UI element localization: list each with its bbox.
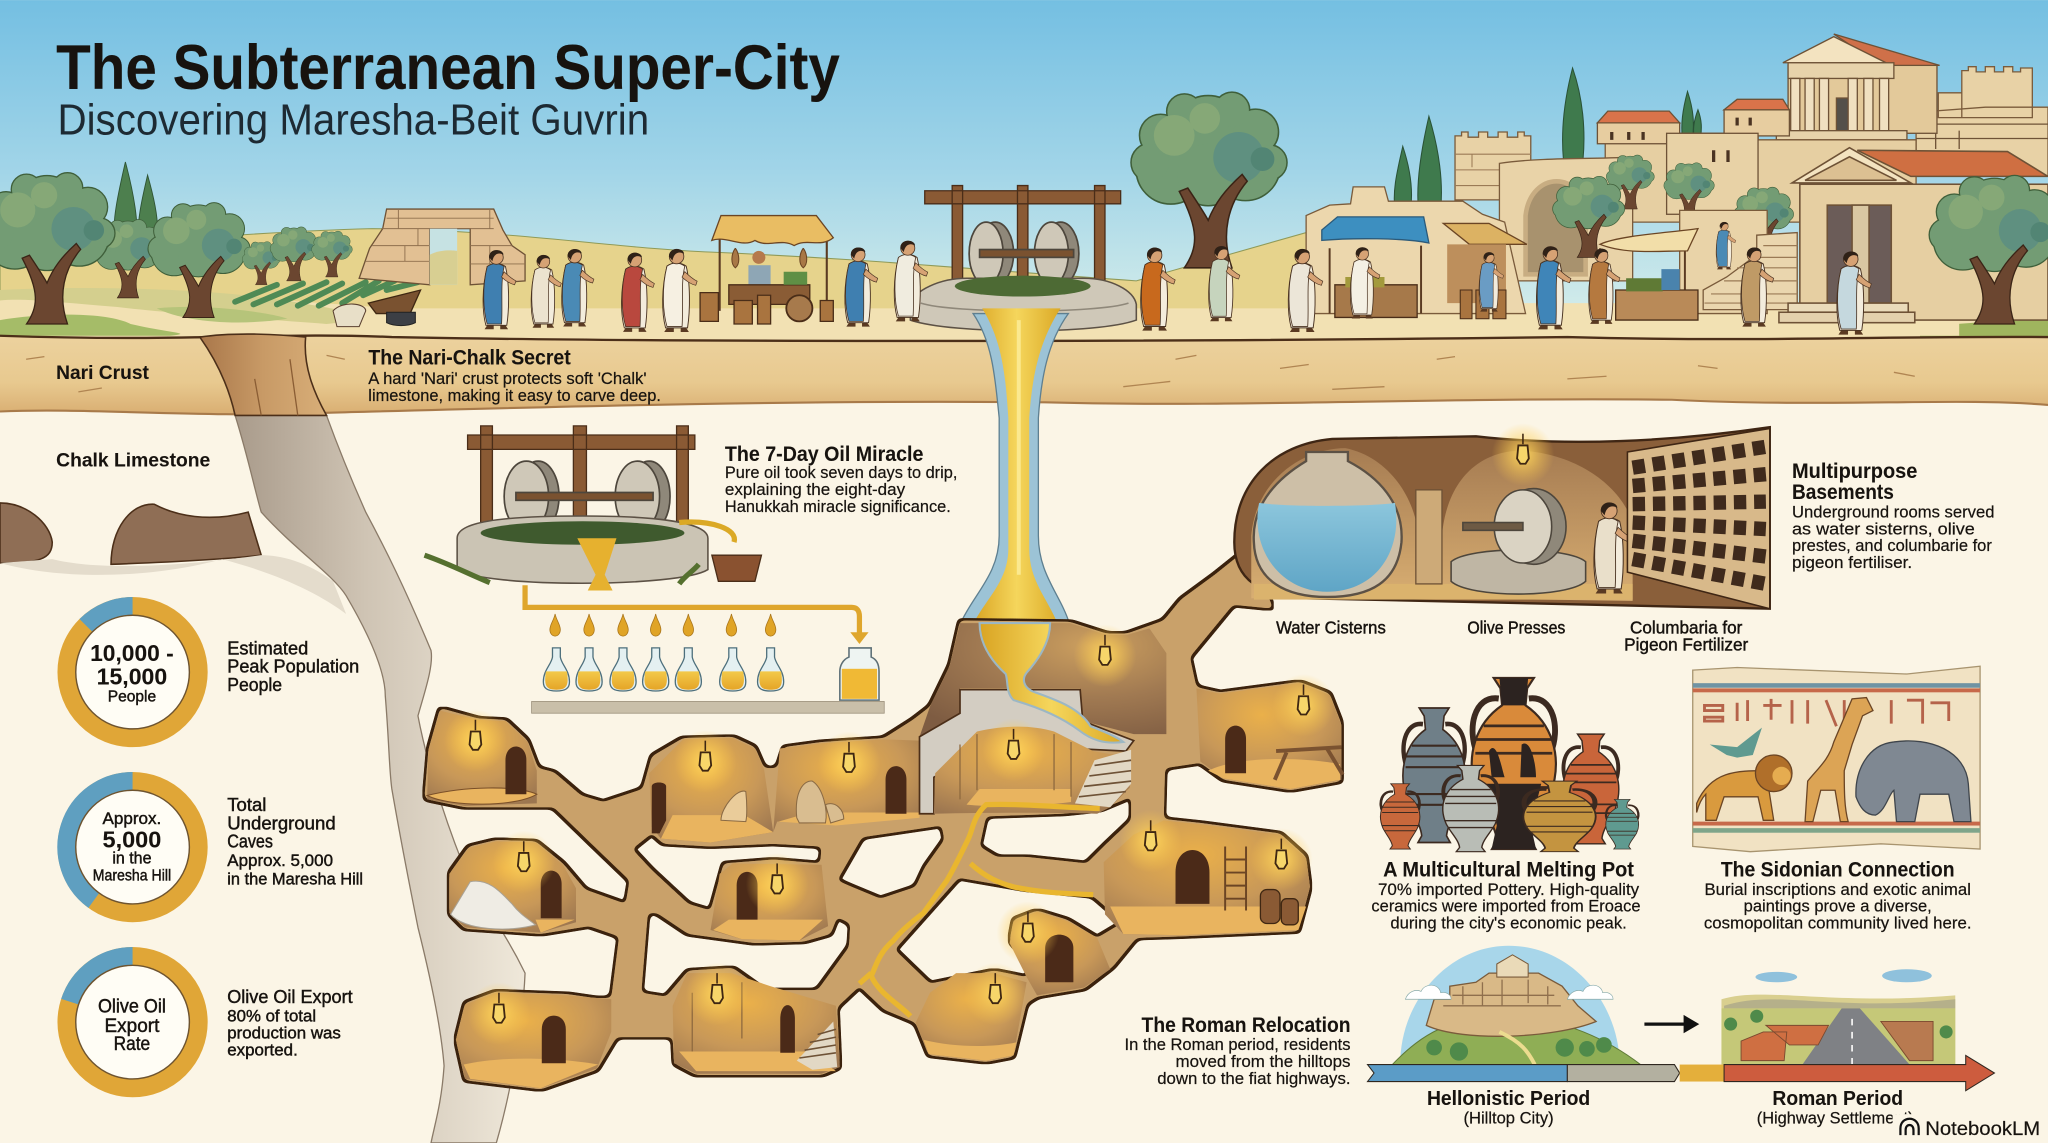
cave: G xyxy=(456,982,611,1088)
gold pipe with arrow xyxy=(525,585,859,637)
lion xyxy=(1697,755,1792,820)
stairs xyxy=(1075,750,1131,807)
full jar xyxy=(840,648,879,700)
cave network xyxy=(424,549,1343,1089)
cave: B xyxy=(649,730,773,843)
text: Hellenistic label: Hellonistic Period xyxy=(1427,1088,1590,1110)
cream awning stall xyxy=(1600,229,1698,320)
black figure details xyxy=(1486,678,1541,849)
rock shaft: crevice through nari crust and chalk xyxy=(200,334,525,1143)
text: caves label: in the Maresha Hill xyxy=(227,869,363,888)
text: Roman Relocation: moved from the hilltops xyxy=(1176,1053,1351,1071)
sky xyxy=(0,0,2048,314)
ruined stone gate xyxy=(359,209,525,285)
callout: 7-Day Oil Miracle xyxy=(725,443,957,516)
text: export label: 80% of total xyxy=(227,1006,316,1025)
city trees xyxy=(1664,163,1714,220)
ring: export xyxy=(67,956,199,1088)
text: export label: Olive Oil Export xyxy=(227,986,353,1007)
surface olive press and basin xyxy=(910,186,1136,624)
callout: 7-Day Oil Miracle: Hanukkah miracle significance. xyxy=(725,498,951,516)
text: population label: People xyxy=(227,674,282,695)
callout: Multipurpose Basements xyxy=(1792,460,1994,572)
text: population label: Estimated xyxy=(227,637,308,658)
stairs xyxy=(1703,233,1797,310)
text: Melting Pot: during the city's economic peak. xyxy=(1390,915,1627,933)
cave: I xyxy=(916,963,1027,1061)
text: basement labels: Pigeon Fertilizer xyxy=(1624,635,1748,655)
ring: caves: 5,000 xyxy=(103,827,161,853)
callout: 7-Day Oil Miracle: explaining the eight-day xyxy=(725,481,906,499)
text: export label xyxy=(227,986,353,1059)
ring: caves: Approx. xyxy=(103,810,161,828)
wheelbarrow cart xyxy=(333,290,421,327)
lamp xyxy=(1492,423,1554,486)
city on the hill xyxy=(1132,34,2048,324)
basin xyxy=(910,278,1136,331)
logo: NotebookLM: NotebookLM xyxy=(1925,1118,2040,1140)
cave: L with bench xyxy=(1196,674,1343,789)
text: basement labels: Water Cisterns xyxy=(1276,618,1386,638)
acropolis temple xyxy=(1776,34,1940,140)
column xyxy=(1416,490,1442,584)
cloud xyxy=(1882,969,1932,982)
text: Sidonian Connection: Burial inscriptions and exotic animal xyxy=(1704,881,1971,899)
press stone basement xyxy=(1451,489,1586,594)
icon: cypress trees left xyxy=(114,162,158,238)
callout: 7-Day Oil Miracle: Pure oil took seven days to drip, xyxy=(725,464,957,482)
text: Sidonian Connection: cosmopolitan community lived here. xyxy=(1704,915,1972,933)
text: Melting Pot: A Multicultural Melting Pot xyxy=(1383,856,1634,881)
callout: Multipurpose Basements: prestes, and columbarie for xyxy=(1792,537,1992,555)
barrels xyxy=(1260,890,1280,924)
basement: multipurpose chambers xyxy=(1234,423,1770,609)
text: Roman Relocation: In the Roman period, residents xyxy=(1125,1036,1351,1054)
callout: Nari-Chalk Secret: The Nari-Chalk Secret xyxy=(368,346,571,369)
callout: Nari-Chalk Secret: limestone, making it easy to carve deep. xyxy=(368,387,661,405)
logo: NotebookLM xyxy=(1893,1114,2048,1143)
large olive tree xyxy=(1132,93,1286,268)
text: Hellenistic label xyxy=(1427,1088,1590,1127)
text: basement labels: Columbaria for xyxy=(1630,618,1742,638)
ring: export: Rate xyxy=(114,1034,150,1055)
ladder xyxy=(1225,846,1246,910)
man xyxy=(1594,503,1632,593)
text: basement labels xyxy=(1276,618,1748,655)
text: caves label: Total xyxy=(227,794,266,815)
text: Sidonian Connection: paintings prove a diverse, xyxy=(1744,898,1932,916)
text: Roman Relocation: down to the fiat highways. xyxy=(1157,1070,1351,1088)
city walls xyxy=(1502,133,1916,222)
drain funnel xyxy=(577,538,616,590)
text: Roman label xyxy=(1757,1088,1913,1127)
text: basement labels: Olive Presses xyxy=(1467,618,1566,638)
left cave openings in rock xyxy=(0,503,346,614)
text: Melting Pot: ceramics were imported from Eroace xyxy=(1371,898,1640,916)
mud building xyxy=(1306,187,1526,314)
background: parchment chalk xyxy=(0,392,2048,1143)
press wheels xyxy=(504,461,670,532)
text: population label: Peak Population xyxy=(227,656,359,677)
oil shaft from press xyxy=(960,314,1070,624)
flasks xyxy=(543,648,784,691)
millstones xyxy=(969,222,1079,285)
cave: H with stairs xyxy=(673,963,840,1074)
ring: caves xyxy=(67,781,199,913)
water xyxy=(1257,503,1396,592)
inscriptions xyxy=(1704,699,1949,726)
cloud xyxy=(1405,985,1451,999)
ring: population: People xyxy=(108,688,156,705)
text: Hellenistic label: (Hilltop City) xyxy=(1464,1109,1554,1127)
stat rings xyxy=(67,606,363,1088)
text: Melting Pot: 70% imported Pottery. High-quality xyxy=(1378,881,1640,899)
ring: population: 15,000 xyxy=(97,663,167,689)
far tower and wall xyxy=(1916,67,2048,176)
lower temple xyxy=(1779,148,2048,323)
gold vein xyxy=(859,804,1100,1016)
title block xyxy=(56,33,840,145)
text: caves label: Caves xyxy=(227,831,273,852)
cloud xyxy=(1567,985,1613,999)
subtitle: Discovering Maresha-Beit Guvrin xyxy=(57,97,649,145)
text: caves label xyxy=(227,794,363,888)
cave: A xyxy=(427,709,537,806)
funnel into hall xyxy=(980,623,1123,743)
cistern flask xyxy=(1254,452,1402,597)
text: Nari Crust label: Nari Crust xyxy=(56,362,149,384)
tunnel silhouette with chalk holes xyxy=(424,549,1341,1089)
drips xyxy=(550,614,776,636)
callout: Multipurpose Basements: as water sisterns, olive xyxy=(1792,520,1975,538)
cave: J xyxy=(997,901,1110,995)
cave: K with ladder and barrels xyxy=(1104,810,1313,935)
title: The Subterranean Super-City xyxy=(56,33,840,103)
text: export label: production was xyxy=(227,1023,341,1042)
market stall left xyxy=(700,216,833,324)
chamber under funnel xyxy=(920,623,1166,737)
ring: caves: Maresha Hill xyxy=(93,867,171,884)
low wall behind stall xyxy=(1680,210,1767,314)
cave: C xyxy=(773,732,920,832)
jar oil xyxy=(842,669,877,699)
illustration: Sidonian tomb mural xyxy=(1693,666,1980,852)
illustration: underground olive press with oil drips xyxy=(424,426,884,713)
columbarium wall xyxy=(1627,428,1770,609)
landscape: distant hills and ground xyxy=(0,229,2048,342)
olive branches xyxy=(424,555,699,584)
callout: Multipurpose Basements: pigeon fertiliser. xyxy=(1792,554,1912,572)
arched gate wall xyxy=(1499,157,1633,281)
room: cistern xyxy=(1251,448,1418,598)
ring: caves: in the xyxy=(112,849,152,867)
text: export label: exported. xyxy=(227,1040,298,1059)
illustration: Hellenistic hilltop city xyxy=(1392,946,1640,1065)
arrow: Hellenistic to Roman xyxy=(1644,1015,1699,1033)
icon: crop rows xyxy=(235,281,418,306)
ring: population: 10,000 - xyxy=(90,640,174,666)
text: Roman label: (Highway Settlement) xyxy=(1757,1109,1913,1127)
right olive tree xyxy=(1930,176,2048,324)
tile-roofed houses xyxy=(1597,99,1789,214)
cave: E with lime pile xyxy=(449,831,576,933)
illustration: Roman highway settlement xyxy=(1721,969,1955,1065)
press basin xyxy=(457,516,708,583)
timeline arrow xyxy=(1368,1055,1994,1091)
icon: olive trees left xyxy=(0,173,352,324)
cypress trees city xyxy=(1394,68,1701,209)
press frame xyxy=(925,186,1121,284)
cave: F xyxy=(711,853,828,940)
callout: Nari-Chalk Secret xyxy=(368,346,661,405)
ring: population xyxy=(67,606,199,738)
text: caves label: Approx. 5,000 xyxy=(227,851,333,870)
callout: 7-Day Oil Miracle: The 7-Day Oil Miracle xyxy=(725,443,923,466)
text: Roman label: Roman Period xyxy=(1772,1088,1903,1110)
cave: central arched hall with stairs xyxy=(920,690,1134,814)
elephant xyxy=(1856,741,1971,822)
illustration: imported pottery xyxy=(1380,678,1639,852)
ring: export: Olive Oil xyxy=(98,996,166,1017)
text: Roman Relocation xyxy=(1125,1014,1351,1088)
people on surface xyxy=(483,222,1871,335)
text: Roman Relocation: The Roman Relocation xyxy=(1142,1014,1351,1037)
tree group left xyxy=(0,162,418,324)
callout: Nari-Chalk Secret: A hard 'Nari' crust protects soft 'Chalk' xyxy=(368,370,647,388)
text: Sidonian Connection: The Sidonian Connection xyxy=(1721,856,1955,881)
callout: Multipurpose Basements: Basements xyxy=(1792,481,1894,504)
giraffe xyxy=(1805,698,1873,822)
callout: Multipurpose Basements: Underground rooms served xyxy=(1792,503,1994,521)
bird xyxy=(1710,728,1762,758)
cloud xyxy=(1755,972,1797,982)
spout and bowl xyxy=(679,522,734,542)
text: Sidonian Connection xyxy=(1704,856,1972,933)
text: population label xyxy=(227,637,359,695)
blue awning stall xyxy=(1322,217,1527,319)
text: caves label: Underground xyxy=(227,812,336,833)
shelf xyxy=(532,701,884,713)
press frame xyxy=(468,426,695,537)
ground: nari crust band xyxy=(0,336,2048,414)
text: Chalk Limestone label: Chalk Limestone xyxy=(56,449,210,471)
callout: Multipurpose Basements: Multipurpose xyxy=(1792,460,1917,483)
ring: export: Export xyxy=(104,1016,160,1037)
text: Melting Pot xyxy=(1371,856,1640,933)
room: press xyxy=(1442,451,1633,601)
